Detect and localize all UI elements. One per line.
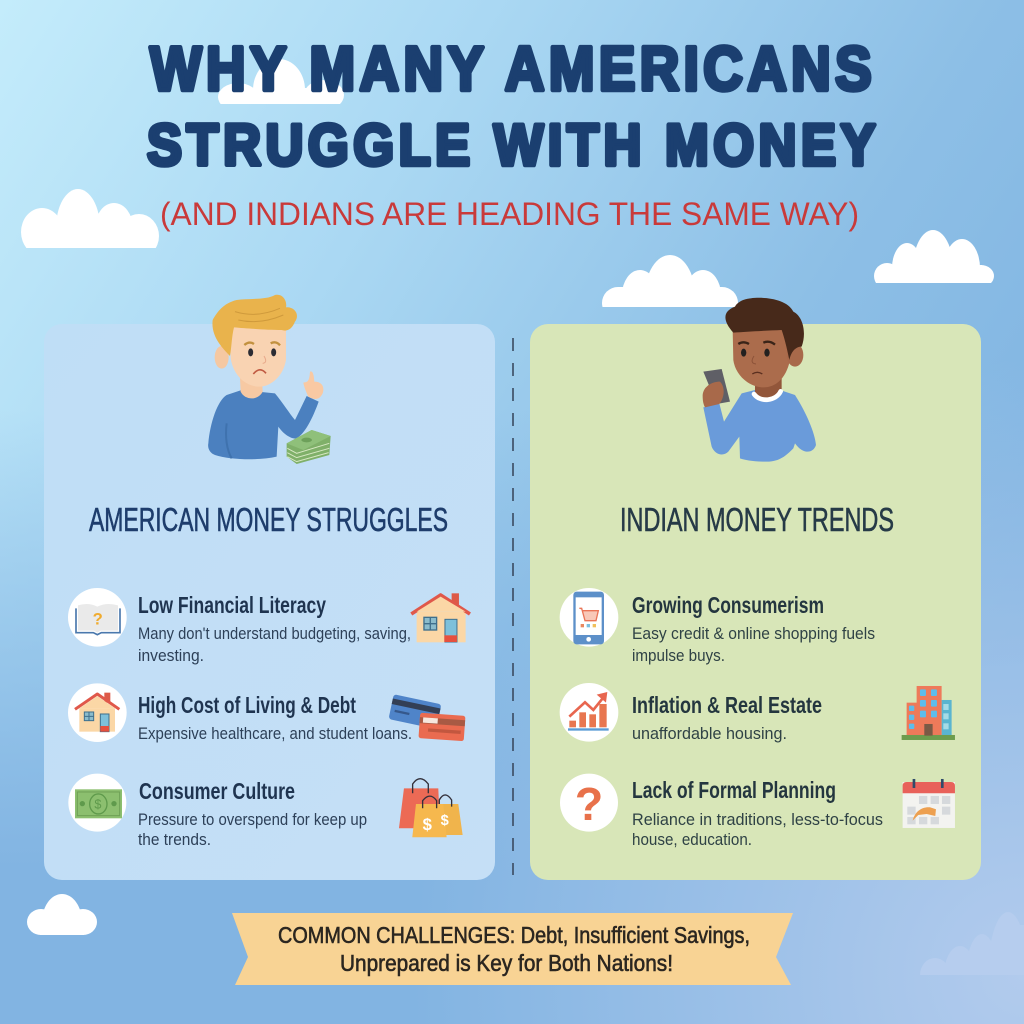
icon: banknote in circle: $	[94, 798, 101, 812]
icon: rising chart	[560, 683, 618, 742]
item: high cost of living: Expensive healthcare, and student loans.	[138, 725, 412, 743]
item: inflation and real estate	[560, 683, 955, 743]
character: indian man	[703, 298, 816, 462]
item: growing consumerism: Growing Consumerism	[632, 592, 824, 618]
cloud behind title	[218, 59, 344, 104]
heading: indian: INDIAN MONEY TRENDS	[620, 501, 894, 538]
item: growing consumerism	[560, 588, 875, 665]
item: growing consumerism: impulse buys.	[632, 647, 725, 665]
item: growing consumerism: Easy credit & online shopping fuels	[632, 625, 875, 643]
icon: house in circle	[68, 683, 127, 742]
icon: shopping bags	[399, 779, 463, 837]
title: STRUGGLE WITH MONEY	[147, 113, 880, 178]
icon: question mark in circle	[560, 774, 618, 832]
item: consumer culture: Consumer Culture	[139, 778, 295, 804]
cloud bottom right	[920, 912, 1018, 975]
icon: phone in hand	[703, 369, 730, 407]
item: low financial literacy: Low Financial Literacy	[138, 592, 326, 618]
item: low financial literacy	[68, 588, 470, 665]
icon: book with question mark: ?	[93, 610, 103, 629]
icon: book with question mark	[68, 588, 127, 647]
item: lack of formal planning: Reliance in traditions, less-to-focus	[632, 811, 883, 829]
panel: indian money trends	[530, 324, 981, 880]
item: high cost of living	[68, 683, 465, 743]
banner: common challenges: Unprepared is Key for Both Nations!	[340, 950, 673, 976]
item: inflation and real estate: Inflation & Real Estate	[632, 692, 822, 718]
title	[147, 35, 880, 178]
icon: cash stack	[287, 430, 331, 464]
item: consumer culture: Pressure to overspend for keep up	[138, 811, 367, 829]
icon: calendar	[903, 779, 955, 828]
item: consumer culture: the trends.	[138, 831, 211, 849]
icon: phone with cart	[560, 588, 618, 647]
icon: shopping bags: $	[423, 815, 433, 834]
banner: common challenges	[232, 913, 793, 985]
icon: banknote in circle	[68, 774, 126, 832]
icon: shopping bags: $	[441, 813, 449, 829]
item: lack of formal planning: Lack of Formal Planning	[632, 777, 836, 803]
panel: american money struggles	[44, 324, 495, 880]
cloud centre	[602, 255, 738, 307]
icon: question mark in circle: ?	[575, 778, 603, 830]
title: WHY MANY AMERICANS	[150, 35, 876, 104]
item: high cost of living: High Cost of Living & Debt	[138, 692, 356, 718]
cloud bottom left	[27, 894, 97, 935]
left list items	[68, 588, 470, 849]
heading: american: AMERICAN MONEY STRUGGLES	[89, 501, 448, 538]
item: low financial literacy: investing.	[138, 647, 204, 665]
item: consumer culture	[68, 774, 463, 849]
cloud right	[874, 230, 994, 283]
character: american man	[208, 295, 331, 464]
icon: house	[411, 593, 470, 642]
item: low financial literacy: Many don't understand budgeting, saving,	[138, 625, 411, 643]
item: lack of formal planning: house, education.	[632, 831, 752, 849]
icon: credit cards	[389, 694, 465, 741]
banner: common challenges: COMMON CHALLENGES: Debt, Insufficient Savings,	[278, 922, 750, 948]
item: inflation and real estate: unaffordable housing.	[632, 725, 787, 743]
right list items	[560, 588, 955, 849]
subtitle: (AND INDIANS ARE HEADING THE SAME WAY)	[160, 196, 859, 232]
icon: buildings	[902, 686, 955, 740]
item: lack of formal planning	[560, 774, 955, 849]
cloud left	[21, 189, 159, 248]
